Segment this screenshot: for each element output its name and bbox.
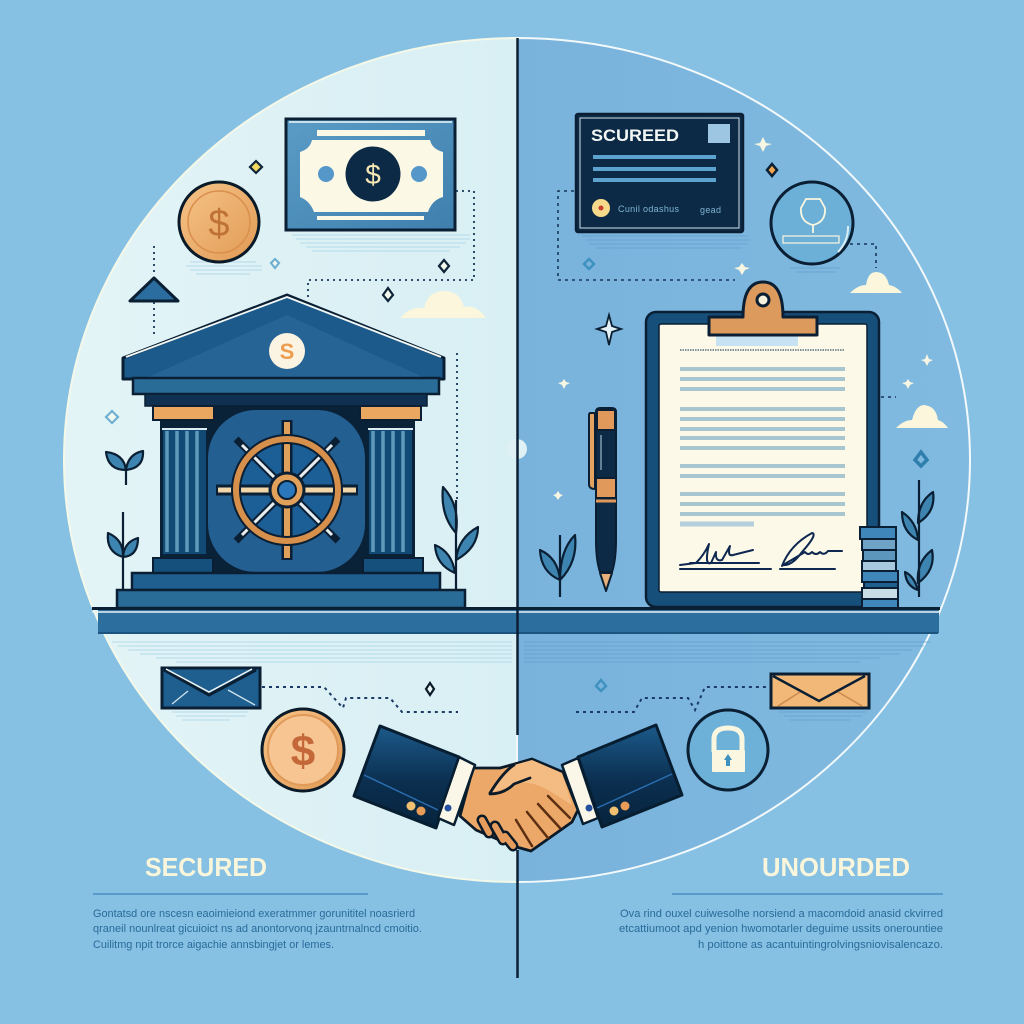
clip [709, 282, 817, 335]
card caption: Cunil odashus [618, 204, 680, 214]
icon: banknote: $ [365, 159, 381, 190]
vault door [208, 410, 365, 572]
cloud right lower [896, 405, 948, 428]
signatures [680, 533, 842, 569]
bank roof [123, 295, 444, 379]
icon: gold coin: $ [208, 203, 230, 245]
roof medallion [269, 333, 305, 369]
right finger creases [516, 796, 570, 846]
left plinth [153, 558, 213, 573]
rule right [672, 893, 943, 895]
step upper [132, 573, 440, 590]
cloud left [400, 291, 486, 318]
roof inner pediment [146, 315, 425, 378]
icon: dollar coin [262, 709, 344, 791]
card lines [593, 157, 716, 180]
plants unsecured [540, 480, 933, 597]
document text lines [680, 350, 845, 524]
heading: secured: SECURED [145, 852, 267, 882]
icon: triangle arrow [130, 278, 178, 301]
cloud right upper [850, 272, 902, 293]
hands [460, 759, 578, 851]
text block: secured [93, 908, 422, 951]
icon: blue envelope [162, 668, 260, 708]
clipboard [646, 282, 879, 607]
shadow hatching [112, 235, 512, 720]
text block: unsecured: etcattiumoot apd yenion hwomotarler deguime ussits onerountiee [619, 923, 943, 935]
sparkles unsecured [553, 137, 933, 500]
entablature shadow [145, 394, 427, 406]
divider notch [507, 439, 527, 459]
sparkles secured [106, 161, 449, 423]
vault body backing [160, 405, 415, 573]
icon: orange envelope [771, 674, 869, 708]
paper [659, 324, 867, 592]
vault wheel [216, 420, 358, 560]
right plinth [363, 558, 423, 573]
thumb [490, 760, 572, 805]
handshake [354, 725, 682, 851]
heading: unsecured: UNOURDED [762, 852, 910, 882]
card heading: SCUREED [591, 126, 679, 145]
icon: loan card [576, 114, 743, 232]
text block: unsecured: Ova rind ouxel cuiwesolhe norsiend a macomdoid anasid ckvirred [620, 908, 943, 920]
right cuff [562, 758, 598, 824]
panel: unsecured half circle [517, 38, 970, 882]
left sleeve [354, 726, 459, 828]
icon: star sparkle [597, 315, 621, 345]
rule left [93, 893, 368, 895]
icon: pen [589, 408, 616, 591]
card badge [708, 124, 730, 143]
connector lines handshake [262, 687, 769, 712]
icon: lens badge [771, 182, 853, 264]
text block: secured: Gontatsd ore nscesn eaoimieiond exeratmmer gorunititel noasrierd [93, 908, 415, 920]
shelf [92, 608, 940, 633]
icon: gold coin [179, 182, 259, 262]
clip shadow [716, 335, 798, 346]
shadow hatching right [524, 236, 930, 720]
roof medallion: S [280, 339, 294, 364]
left capital [153, 406, 214, 420]
card seal [592, 199, 610, 217]
icon: banknote [286, 119, 455, 230]
icon: padlock badge [688, 710, 768, 790]
text block: secured: Cuilitmg npit trorce aigachie annsbingjet or lemes. [93, 939, 334, 951]
card code: gead [700, 205, 721, 215]
plants secured [106, 451, 478, 590]
left fingers [482, 820, 513, 846]
text block: unsecured: h poittone as acantuintingrolvingsniovisalencazo. [698, 939, 943, 951]
board [646, 312, 879, 607]
palm [460, 759, 578, 851]
left cuff [438, 757, 475, 825]
icon: small diamond [426, 683, 434, 695]
icon: coin stack [860, 527, 898, 608]
left column [162, 428, 207, 554]
center divider line [516, 38, 519, 978]
panel: secured half circle [64, 38, 517, 882]
roof highlight [126, 297, 441, 357]
right capital [360, 406, 421, 420]
icon: gold diamond [767, 164, 777, 176]
text block: unsecured [619, 908, 943, 951]
icon: blue diamonds [584, 259, 927, 691]
right column [368, 428, 413, 554]
icon: dollar coin: $ [291, 727, 315, 776]
step lower [117, 590, 465, 608]
connector lines secured [154, 191, 474, 500]
right sleeve [578, 725, 682, 827]
connector lines unsecured [558, 191, 896, 397]
text block: secured: qraneil nounlreat gicuioict ns ad anontorvonq jzauntrnalncd cmoitio. [93, 923, 422, 935]
entablature [133, 378, 439, 394]
bank building [117, 295, 465, 608]
